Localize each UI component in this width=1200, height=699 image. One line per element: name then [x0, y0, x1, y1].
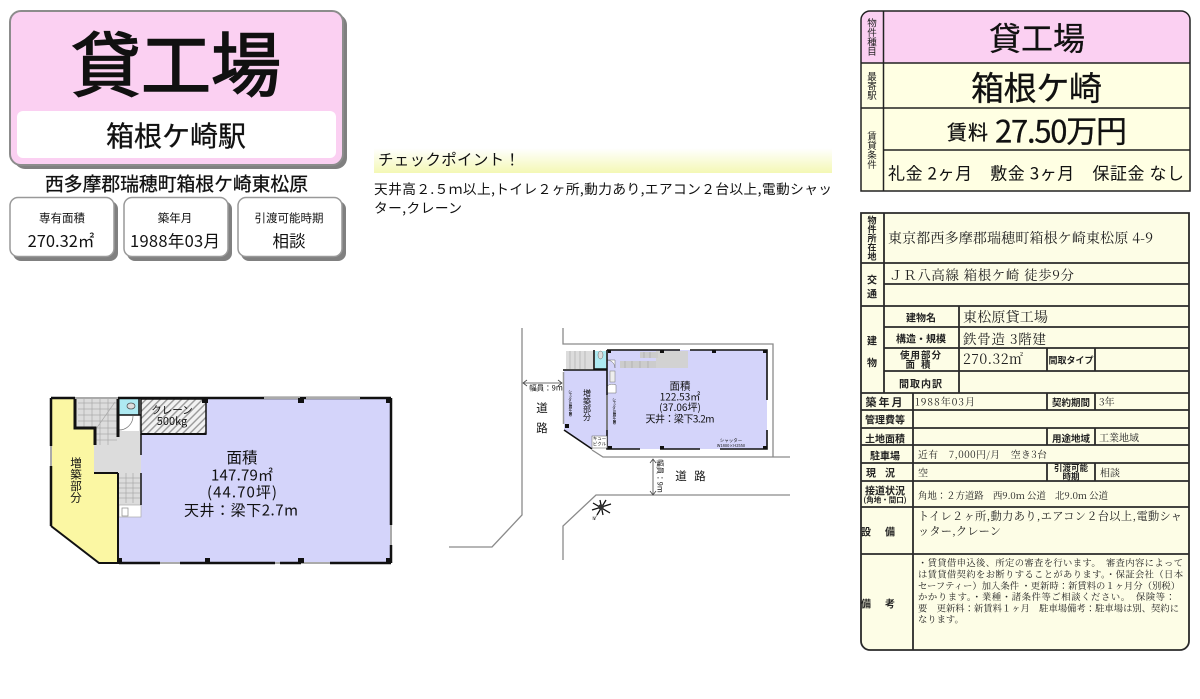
detail labels: 物件所在地 [866, 214, 878, 260]
detail values: 1988年03月 [915, 394, 975, 408]
panel: property type header [10, 10, 347, 169]
panel: detail table [861, 213, 1189, 650]
info cards [10, 198, 346, 261]
info cards: 専有面積 [39, 210, 85, 226]
panel: summary table: 箱根ケ崎 [971, 62, 1102, 110]
area label: 122.53㎡ [660, 388, 700, 404]
detail labels: 現況 [866, 464, 904, 480]
site map: roads: 道 [536, 400, 548, 416]
panel: property type header: 箱根ケ崎駅 [106, 115, 246, 155]
crane area [141, 399, 206, 434]
title: 貸工場 [71, 10, 281, 112]
label: floor area [184, 446, 298, 520]
detail values: かかります。・業種・諸条件等ご相談ください。 保険等： [918, 589, 1175, 603]
icon: compass [592, 500, 611, 522]
detail labels: 交 [867, 272, 877, 286]
annex label: 増築部分 [582, 388, 592, 422]
info cards: 引渡可能時期 [254, 210, 324, 226]
info cards: 1988年03月 [130, 228, 220, 252]
info cards: 270.32㎡ [28, 228, 95, 252]
panel: check point: チェックポイント！ [378, 148, 520, 170]
detail values: セーフティー）加入条件 ・更新時：新賃料の１ヶ月分（別税） [918, 578, 1180, 592]
site map: building: シャッター W2630×H2660 [611, 397, 617, 425]
cubicle label: キュー [593, 436, 607, 442]
toilet [118, 399, 139, 415]
detail labels: 建 [867, 332, 877, 348]
panel: summary table: 賃料 [947, 116, 988, 146]
info cards: 築年月 [158, 210, 192, 226]
detail labels: 備考 [861, 596, 909, 610]
detail values: 3年 [1099, 394, 1115, 408]
site map: building [563, 350, 767, 449]
detail labels: (角地・間口) [863, 494, 907, 506]
summary labels: 物件種目 [865, 17, 879, 56]
crane area: 500kg [157, 413, 188, 429]
detail labels: 設備 [861, 524, 909, 538]
detail values: ・賃貸借申込後、所定の審査を行います。 審査内容によって [918, 555, 1183, 569]
detail values: 東松原貸工場 [963, 307, 1048, 327]
icon: compass: N [592, 516, 596, 522]
detail labels: 通 [867, 286, 877, 300]
detail values: 相談 [1100, 464, 1120, 480]
detail labels: 管理費等 [865, 412, 905, 426]
shutter label: W1800×H2550 [717, 443, 746, 449]
detail labels: 時期 [1062, 470, 1080, 482]
area label [646, 378, 714, 426]
site map: roads: 路 [536, 420, 548, 436]
crane area: クレーン [151, 402, 193, 418]
site map: building: シャッター W2630×H2660 [567, 389, 573, 417]
site map: roads [449, 328, 790, 560]
area label: 面積 [670, 378, 691, 394]
site map: roads: 幅員：9m [529, 382, 563, 394]
detail labels: 使用部分 [900, 348, 942, 362]
detail labels: 築年月 [866, 394, 904, 410]
detail labels: 引渡可能 [1054, 462, 1088, 474]
floor plan: first floor [51, 398, 391, 563]
detail labels: 接道状況 [865, 482, 905, 498]
detail values: 空 [918, 464, 928, 480]
site map: roads: 幅員：9m [654, 459, 666, 493]
detail labels: 構造・規模 [896, 330, 946, 346]
detail labels: 駐車場 [870, 448, 900, 462]
panel: summary table [861, 11, 1190, 191]
detail labels: 契約期間 [1052, 395, 1090, 409]
site map: roads: 路 [694, 468, 706, 484]
detail labels: 建物名 [906, 310, 936, 324]
panel: check point: 天井高２.５ｍ以上,トイレ２ヶ所,動力あり,エアコン２台以上,電動シャッ [374, 178, 832, 198]
info cards: 相談 [272, 228, 306, 252]
label: extension: 増築部分 [68, 457, 84, 504]
label: floor area: 面積 [226, 446, 258, 468]
detail values: 鉄骨造 3階建 [963, 328, 1046, 348]
panel: summary table: 貸工場 [989, 14, 1085, 60]
cubicle label [592, 436, 607, 448]
detail values: トイレ２ヶ所,動力あり,エアコン２台以上,電動シャ [918, 508, 1182, 524]
shutter label: シャッター [720, 437, 743, 444]
address heading: 西多摩郡瑞穂町箱根ケ崎東松原 [45, 170, 308, 196]
area label: (37.06坪) [659, 399, 701, 414]
detail values: ッター,クレーン [918, 523, 1001, 539]
area label: 天井：梁下3.2m [646, 410, 714, 426]
cubicle label: ビクル [593, 440, 607, 448]
panel: summary table: 27.50万円 [995, 106, 1127, 152]
summary labels: 賃貸条件 [865, 130, 879, 170]
detail labels: 用途地域 [1052, 431, 1090, 445]
detail values: 270.32㎡ [963, 349, 1023, 369]
detail labels [861, 214, 1094, 611]
detail values [888, 228, 1183, 626]
label: floor area: 天井：梁下2.7m [184, 500, 298, 520]
shutter label [717, 437, 746, 449]
label: floor area: 147.79㎡ [211, 464, 273, 486]
detail labels: 土地面積 [865, 430, 905, 446]
extension area [52, 399, 118, 562]
detail values: は賃貸借契約をお断りすることがあります。・保証会社（日本 [918, 566, 1183, 580]
detail labels: 間取内訳 [899, 376, 943, 390]
detail values: 要 更新料：新賃料１ヶ月 駐車場備考：駐車場は別、契約に [918, 600, 1179, 614]
site map: roads: 道 [675, 468, 687, 484]
detail values: 東京都西多摩郡瑞穂町箱根ケ崎東松原 4-9 [888, 228, 1153, 248]
detail values: ＪＲ八高線 箱根ケ崎 徒歩9分 [889, 264, 1074, 284]
detail values: 近有 7,000円/月 空き3台 [918, 447, 1047, 461]
detail labels: 面積 [905, 357, 937, 371]
summary labels: 最寄駅 [865, 72, 879, 101]
stairs [78, 399, 140, 503]
detail values: 工業地域 [1099, 430, 1139, 444]
panel: check point [374, 148, 832, 217]
label: floor area: (44.70坪) [207, 482, 277, 502]
road width arrows [523, 380, 656, 495]
panel: summary table: 礼金 2ヶ月 敷金 3ヶ月 保証金 なし [888, 160, 1184, 184]
main area [119, 399, 390, 562]
detail labels: 間取タイプ [1048, 354, 1094, 366]
panel: check point: ター,クレーン [374, 197, 462, 217]
summary labels [865, 17, 879, 170]
detail values: なります。 [918, 612, 964, 626]
detail values: 角地：２方道路 西9.0m 公道 北9.0m 公道 [918, 488, 1108, 502]
detail labels: 物 [867, 354, 877, 370]
